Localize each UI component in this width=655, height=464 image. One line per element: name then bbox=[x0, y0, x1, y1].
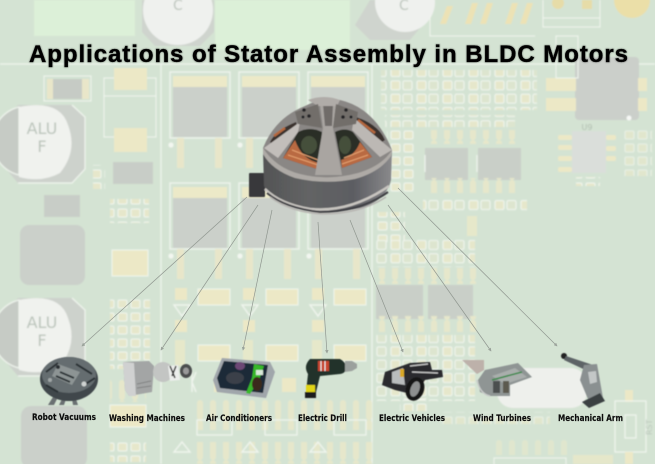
PCB background: F bbox=[37, 331, 47, 350]
motor: central BLDC stator assembly bbox=[249, 97, 392, 214]
label: Mechanical Arm: Mechanical Arm bbox=[558, 414, 623, 424]
PCB background: RST bbox=[645, 419, 654, 435]
spokes bbox=[264, 122, 300, 158]
icon: electric vehicle bbox=[382, 362, 443, 403]
title: Applications of Stator Assembly in BLDC Motors bbox=[29, 41, 628, 68]
icon: wind turbine bbox=[462, 360, 532, 396]
icon: robot vacuum bbox=[40, 357, 98, 405]
coil bay rear left bbox=[270, 122, 298, 150]
icon: mechanical arm bbox=[561, 353, 605, 408]
label: Electric Vehicles: Electric Vehicles bbox=[379, 414, 445, 424]
coil bay front left bbox=[283, 129, 322, 170]
icon: washing machine bbox=[123, 361, 192, 396]
title: Applications of Stator Assembly in BLDC Motors bbox=[29, 41, 628, 68]
connector lines from motor to applications bbox=[82, 188, 557, 353]
icon: electric drill bbox=[305, 359, 357, 398]
silver rim bbox=[263, 148, 392, 182]
label: Robot Vacuums: Robot Vacuums bbox=[32, 413, 96, 423]
PCB background: U9 bbox=[582, 123, 592, 132]
icon: air conditioner bbox=[213, 358, 275, 398]
PCB background: ALU bbox=[27, 313, 57, 332]
PCB background: ALU bbox=[27, 119, 57, 138]
label: Wind Turbines: Wind Turbines bbox=[473, 414, 531, 424]
PCB background: F bbox=[37, 137, 47, 156]
label: Air Conditioners: Air Conditioners bbox=[206, 414, 272, 424]
label: Washing Machines: Washing Machines bbox=[109, 414, 185, 424]
label: Electric Drill: Electric Drill bbox=[298, 414, 347, 424]
